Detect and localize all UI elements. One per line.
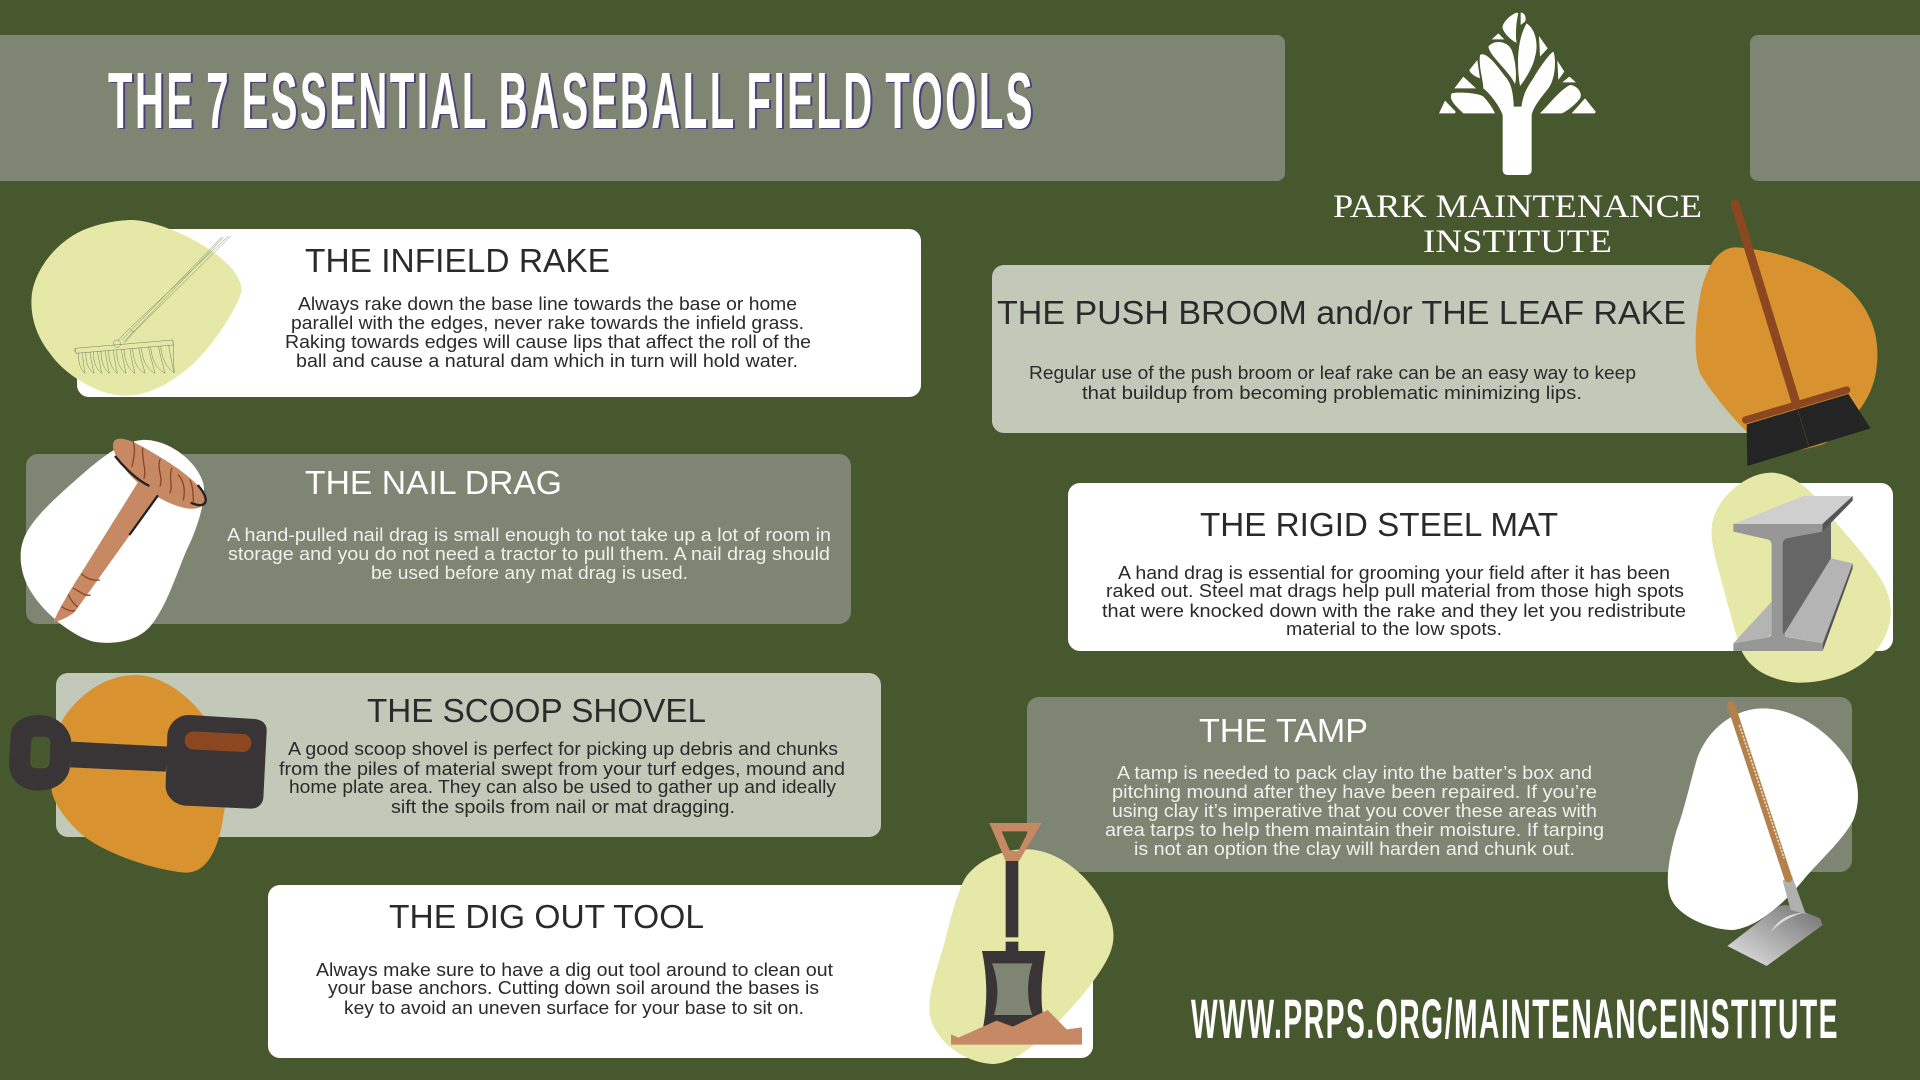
title banner: THE 7 ESSENTIAL BASEBALL FIELD TOOLS xyxy=(110,57,1037,146)
text: nail drag body: A hand-pulled nail drag is small enough to not take up a lot of room in xyxy=(227,524,831,545)
text: rigid steel mat body xyxy=(1102,562,1686,639)
text: push broom body: that buildup from becoming problematic minimizing lips. xyxy=(1082,382,1582,403)
panel: the tamp xyxy=(1027,697,1858,966)
icon: nail on white blob xyxy=(21,439,206,643)
logo wordmark: PARK MAINTENANCE xyxy=(1333,189,1702,225)
text: tamp body: area tarps to help them maintain their moisture. If tarping xyxy=(1105,819,1604,840)
text: infield rake body: Always rake down the base line towards the base or home xyxy=(298,293,797,314)
text: scoop shovel body: sift the spoils from nail or mat dragging. xyxy=(391,796,735,817)
text: dig out tool body xyxy=(316,959,833,1018)
text: scoop shovel body: A good scoop shovel is perfect for picking up debris and chunks xyxy=(288,738,838,759)
icon: scoop shovel on orange blob xyxy=(9,675,267,873)
text: push broom body xyxy=(1029,362,1636,403)
text: dig out tool body: your base anchors. Cutting down soil around the bases is xyxy=(328,977,819,998)
text: rigid steel mat body: that were knocked down with the rake and they let you redistribute xyxy=(1102,600,1686,621)
text: dig out tool body: Always make sure to have a dig out tool around to clean out xyxy=(316,959,833,980)
text: scoop shovel body: home plate area. They can also be used to gather up and ideally xyxy=(289,776,837,797)
heading: the dig out tool: THE DIG OUT TOOL xyxy=(389,898,704,935)
heading: the tamp: THE TAMP xyxy=(1199,712,1368,749)
icon: steel beam on yellow blob xyxy=(1712,473,1891,683)
heading: the nail drag: THE NAIL DRAG xyxy=(305,464,562,501)
text: push broom body: Regular use of the push broom or leaf rake can be an easy way to keep xyxy=(1029,362,1636,383)
icon: dig out tool on yellow blob xyxy=(929,823,1113,1064)
text: infield rake body xyxy=(285,293,811,371)
text: tamp body: A tamp is needed to pack clay into the batter’s box and xyxy=(1117,762,1592,783)
text: tamp body: using clay it’s imperative that you cover these areas with xyxy=(1112,800,1597,821)
text: scoop shovel body: from the piles of material swept from your turf edges, mound and xyxy=(279,758,845,779)
logo: Park Maintenance Institute xyxy=(1333,13,1702,260)
logo wordmark xyxy=(1333,189,1702,260)
text: nail drag body: be used before any mat drag is used. xyxy=(371,562,688,583)
text: tamp body xyxy=(1105,762,1604,859)
panel: the dig out tool xyxy=(268,823,1113,1064)
icon: push broom on orange blob xyxy=(1696,204,1877,466)
panel: the infield rake xyxy=(31,220,921,397)
title banner xyxy=(0,35,1920,181)
text: rigid steel mat body: raked out. Steel mat drags help pull material from those high spots xyxy=(1106,580,1684,601)
heading: the infield rake: THE INFIELD RAKE xyxy=(305,242,610,279)
text: infield rake body: parallel with the edges, never rake towards the infield grass. xyxy=(291,312,804,333)
text: dig out tool body: key to avoid an uneven surface for your base to sit on. xyxy=(344,997,804,1018)
text: nail drag body xyxy=(227,524,831,583)
heading: the rigid steel mat: THE RIGID STEEL MAT xyxy=(1200,506,1558,543)
panel: the scoop shovel xyxy=(9,673,881,873)
text: tamp body: is not an option the clay will harden and chunk out. xyxy=(1134,838,1575,859)
icon: tamp on white blob xyxy=(1668,705,1858,966)
heading: push broom and/or leaf rake: THE PUSH BROOM and/or THE LEAF RAKE xyxy=(997,294,1686,331)
text: infield rake body: ball and cause a natural dam which in turn will hold water. xyxy=(296,350,798,371)
icon: tree xyxy=(1439,13,1596,175)
heading: the scoop shovel: THE SCOOP SHOVEL xyxy=(367,692,706,729)
text: tamp body: pitching mound after they have been repaired. If you’re xyxy=(1112,781,1597,802)
text: rigid steel mat body: material to the low spots. xyxy=(1286,618,1502,639)
logo wordmark: INSTITUTE xyxy=(1423,224,1612,260)
text: nail drag body: storage and you do not need a tractor to pull them. A nail drag should xyxy=(228,543,830,564)
text: infield rake body: Raking towards edges will cause lips that affect the roll of the xyxy=(285,331,811,352)
panel: the push broom and/or the leaf rake xyxy=(992,265,1772,433)
panel: the nail drag xyxy=(21,439,851,643)
panel: the rigid steel mat xyxy=(1068,473,1893,683)
title banner: THE 7 ESSENTIAL BASEBALL FIELD TOOLS xyxy=(108,56,1035,145)
icon: rake on yellow blob xyxy=(31,220,242,396)
text: scoop shovel body xyxy=(279,738,845,817)
text: rigid steel mat body: A hand drag is essential for grooming your field after it has been xyxy=(1118,562,1670,583)
